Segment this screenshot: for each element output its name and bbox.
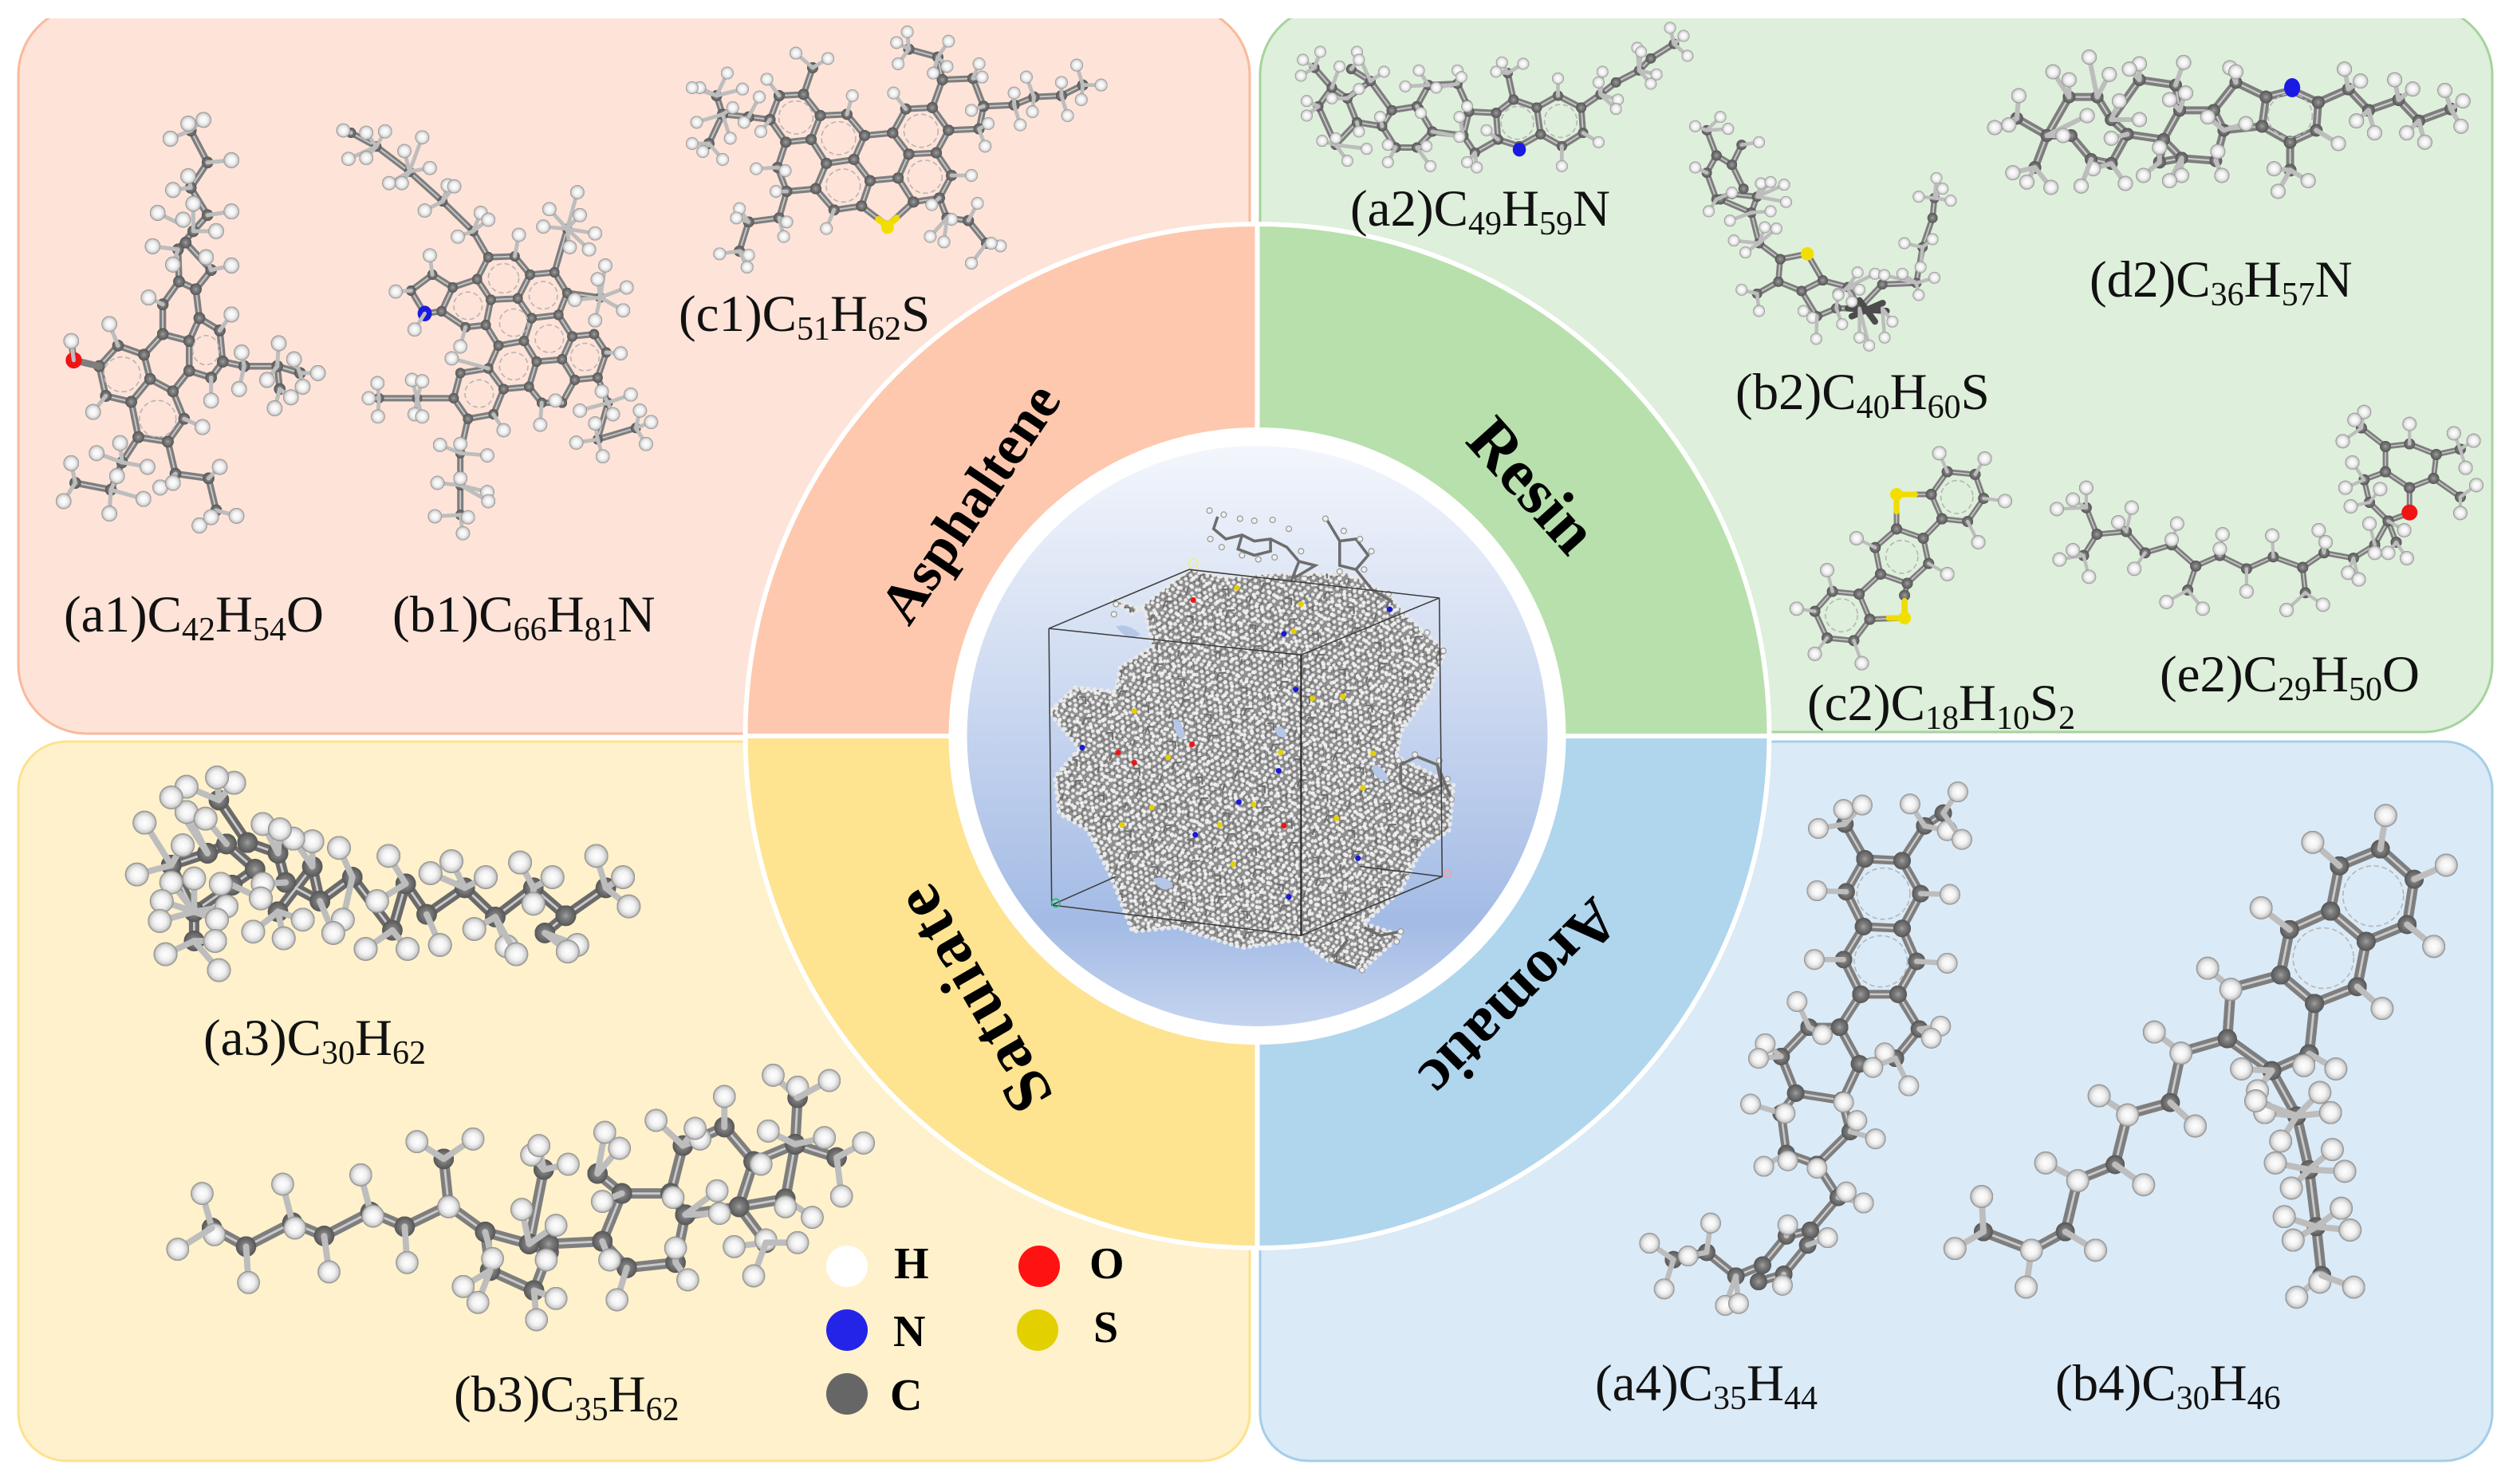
label c2: H (1959, 675, 1996, 732)
molecular mass in cubic cell (1049, 510, 1454, 970)
molecule b2 (1696, 117, 1951, 345)
label c2: 18 (1925, 700, 1959, 737)
label e2: 29 (2278, 671, 2311, 708)
heading: Saturate: Satuiate (880, 873, 1067, 1125)
center circle: simulation cell (949, 427, 1566, 1045)
molecule e2 (2057, 412, 2476, 610)
panel: saturate background (18, 742, 1250, 1461)
label c2: S (2030, 675, 2058, 732)
label d2: (d2)C (2090, 251, 2211, 309)
top white margin (0, 0, 2513, 18)
label a1: O (286, 586, 324, 644)
panel: aromatic background (1260, 742, 2492, 1461)
legend item H (826, 1239, 929, 1289)
label a2: H (1502, 180, 1539, 238)
label b3: (b3)C (454, 1366, 575, 1423)
label b1: 66 (514, 612, 547, 648)
molecule c2 (1797, 453, 2005, 663)
label a1: 54 (253, 612, 286, 648)
label d2: 36 (2211, 277, 2244, 313)
label b1: 81 (585, 612, 618, 648)
label c1: H (830, 285, 868, 343)
label d2: H (2244, 251, 2282, 309)
label a2: (a2)C (1350, 180, 1468, 238)
heading: Resin: Resin (1453, 403, 1612, 568)
label c1: S (901, 285, 930, 343)
ring sector: asphaltene (745, 224, 1257, 736)
heading: Asphaltene: Asphaltene (867, 372, 1073, 635)
label d2: N (2315, 251, 2353, 309)
label c2: 10 (1996, 700, 2030, 737)
label a1: H (215, 586, 253, 644)
label a2: 49 (1468, 206, 1502, 242)
label c1: 51 (797, 311, 830, 348)
legend item N (826, 1307, 925, 1356)
ring sector: resin (1257, 224, 1769, 736)
label b4: 30 (2176, 1380, 2210, 1417)
molecule d2 (1995, 57, 2463, 191)
molecule b4 (1955, 816, 2446, 1297)
label a2: N (1573, 180, 1610, 238)
label b1: N (618, 586, 656, 644)
label a4: 35 (1713, 1380, 1747, 1417)
label a2: 59 (1539, 206, 1573, 242)
label a3: (a3)C (203, 1010, 321, 1067)
molecule a3 (137, 777, 628, 970)
label b2: 60 (1928, 389, 1961, 426)
label b2: (b2)C (1735, 364, 1857, 421)
label b3: 35 (575, 1391, 609, 1428)
legend: atom colours (826, 1239, 1125, 1420)
label b4: (b4)C (2055, 1355, 2176, 1412)
panel: resin background (1260, 6, 2492, 732)
label b2: 40 (1857, 389, 1890, 426)
legend item C: C (890, 1371, 922, 1420)
label e2: (e2)C (2160, 646, 2278, 703)
label b1: (b1)C (392, 586, 514, 644)
label a4: (a4)C (1595, 1355, 1713, 1412)
label c1: 62 (868, 311, 901, 348)
molecule a2 (1301, 28, 1688, 167)
label a3: 62 (392, 1035, 426, 1072)
molecule b3 (178, 1075, 864, 1320)
legend item S: S (1093, 1303, 1118, 1352)
molecule a1 (64, 120, 318, 526)
legend item N: N (893, 1307, 925, 1356)
label e2: H (2311, 646, 2349, 703)
label e2: 50 (2349, 671, 2382, 708)
ring sector: aromatic (1257, 736, 1769, 1248)
ring sector: saturate (745, 736, 1257, 1248)
label b3: H (609, 1366, 646, 1423)
legend item H: H (894, 1239, 929, 1289)
label a1: (a1)C (64, 586, 182, 644)
label b4: H (2210, 1355, 2247, 1412)
label b2: H (1890, 364, 1928, 421)
legend item S (1017, 1303, 1118, 1352)
label c1: (c1)C (679, 285, 797, 343)
label e2: O (2382, 646, 2420, 703)
label c2: (c2)C (1807, 675, 1925, 732)
label a3: 30 (321, 1035, 355, 1072)
panel: asphaltene background (18, 6, 1250, 734)
molecule c1 (692, 32, 1101, 267)
heading: Aromatic: Aromatic (1406, 885, 1633, 1112)
legend item O: O (1089, 1239, 1125, 1289)
label b4: 46 (2247, 1380, 2281, 1417)
label b1: H (547, 586, 585, 644)
label b2: S (1961, 364, 1990, 421)
label a3: H (355, 1010, 392, 1067)
label a4: H (1747, 1355, 1784, 1412)
label a1: 42 (182, 612, 215, 648)
legend item O (1018, 1239, 1125, 1289)
label b3: 62 (646, 1391, 679, 1428)
legend item C (826, 1371, 922, 1420)
molecule b1 (344, 131, 651, 533)
label d2: 57 (2282, 277, 2315, 313)
label a4: 44 (1784, 1380, 1818, 1417)
molecule a4 (1649, 792, 1962, 1305)
label c2: 2 (2058, 700, 2075, 737)
